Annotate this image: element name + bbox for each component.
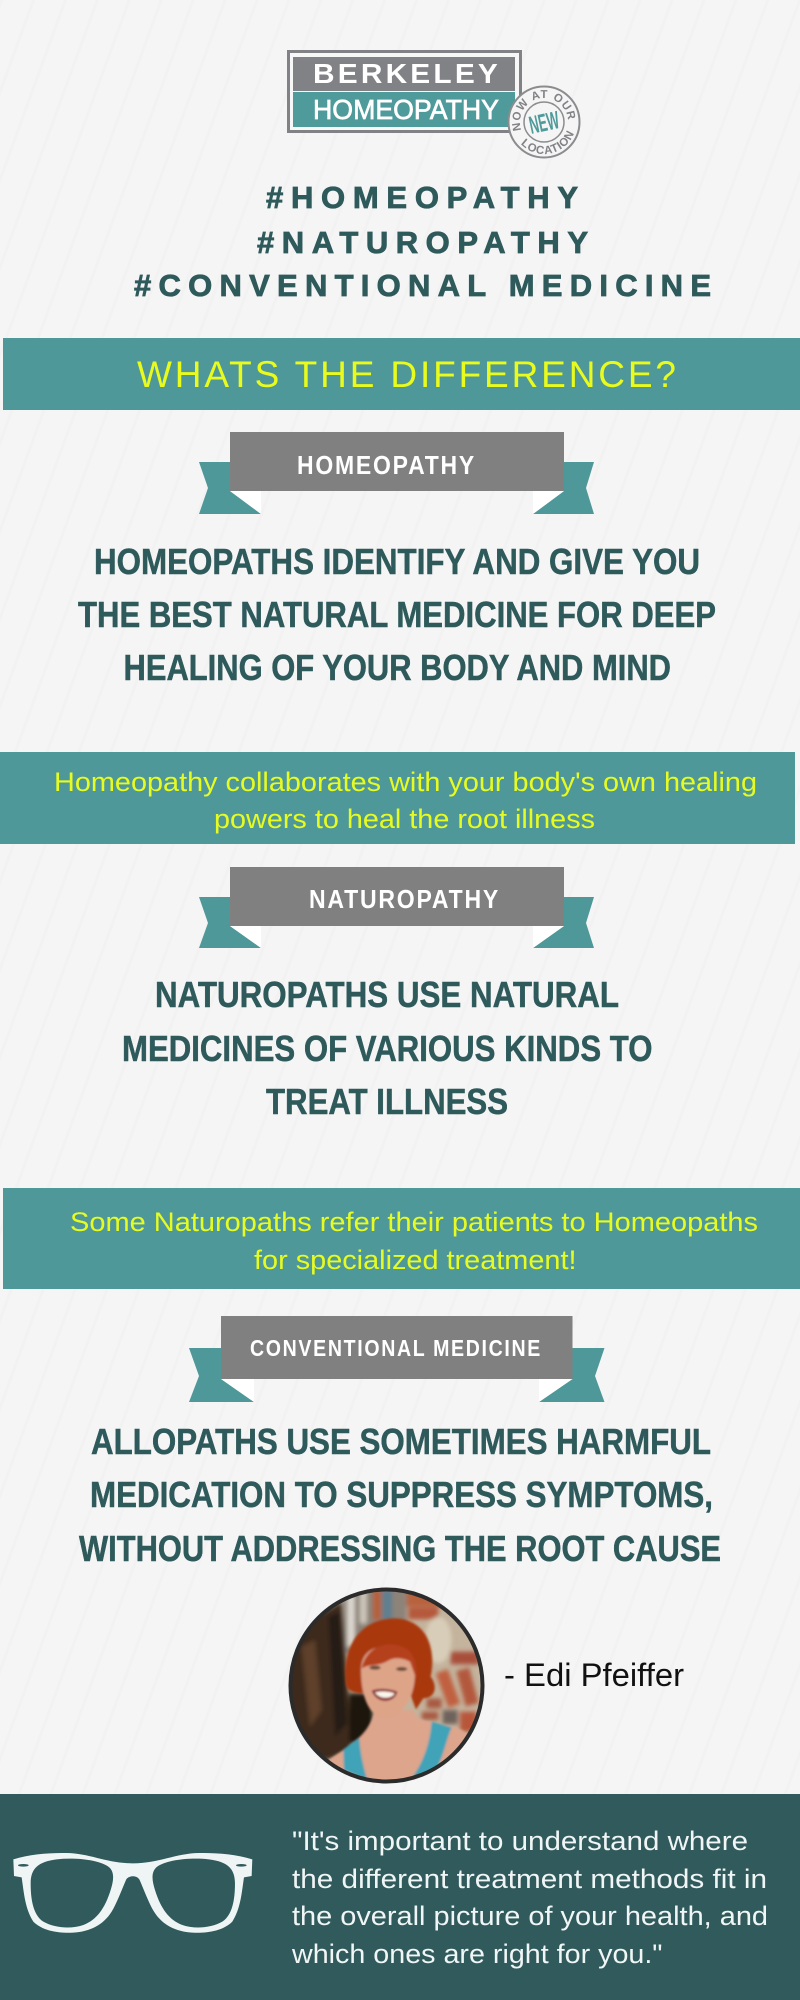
naturopathy description: TREAT ILLNESS	[266, 1081, 508, 1122]
homeopathy description: HOMEOPATHS IDENTIFY AND GIVE YOU	[94, 541, 700, 582]
callout: naturopaths refer	[3, 1188, 800, 1289]
logo: Berkeley Homeopathy: HOMEOPATHY	[313, 94, 499, 125]
badge: now at our new location: LOCATION	[521, 130, 574, 154]
naturopathy description	[122, 974, 652, 1122]
hashtag heading: #CONVENTIONAL MEDICINE	[134, 268, 711, 303]
ribbon: naturopathy: NATUROPATHY	[309, 884, 500, 914]
icon: glasses	[13, 1853, 252, 1933]
badge: now at our new location: NOW AT OUR	[512, 90, 576, 131]
callout: naturopaths refer: Some Naturopaths refer their patients to Homeopaths	[70, 1207, 758, 1237]
conventional medicine description: ALLOPATHS USE SOMETIMES HARMFUL	[91, 1421, 711, 1462]
conventional medicine description: MEDICATION TO SUPPRESS SYMPTOMS,	[90, 1474, 713, 1515]
logo: Berkeley Homeopathy: BERKELEY	[313, 58, 501, 89]
homeopathy description: THE BEST NATURAL MEDICINE FOR DEEP	[78, 594, 716, 635]
badge: now at our new location: NEW	[527, 106, 562, 140]
naturopathy description: NATUROPATHS USE NATURAL	[155, 974, 619, 1015]
callout: homeopathy collaborates	[0, 752, 795, 844]
ribbon: conventional medicine: CONVENTIONAL MEDICINE	[250, 1335, 542, 1361]
quote	[291, 1826, 768, 1969]
quote: "It's important to understand where	[292, 1826, 748, 1856]
conventional medicine description	[79, 1421, 721, 1569]
ribbon: homeopathy: HOMEOPATHY	[297, 450, 476, 480]
quote: which ones are right for you."	[291, 1939, 662, 1969]
quote: the different treatment methods fit in	[292, 1864, 767, 1894]
attribution: Edi Pfeiffer: - Edi Pfeiffer	[504, 1657, 684, 1693]
homeopathy description	[78, 541, 716, 688]
hashtag heading: #NATUROPATHY	[257, 225, 588, 260]
ribbon: conventional medicine	[189, 1316, 604, 1402]
naturopathy description: MEDICINES OF VARIOUS KINDS TO	[122, 1028, 652, 1069]
callout: homeopathy collaborates: powers to heal the root illness	[214, 804, 595, 834]
footer band	[0, 1794, 800, 2000]
portrait photo	[287, 1587, 487, 1787]
ribbon: homeopathy	[199, 432, 594, 514]
homeopathy description: HEALING OF YOUR BODY AND MIND	[124, 647, 671, 688]
callout: homeopathy collaborates: Homeopathy collaborates with your body's own healing	[54, 767, 757, 797]
quote: the overall picture of your health, and	[292, 1901, 768, 1931]
ribbon: naturopathy	[199, 867, 594, 948]
banner: whats the difference: WHATS THE DIFFERENCE?	[137, 354, 676, 395]
logo: Berkeley Homeopathy	[287, 50, 580, 158]
hashtag heading: #HOMEOPATHY	[266, 180, 578, 215]
hashtag heading	[134, 180, 711, 303]
badge: now at our new location	[508, 86, 580, 158]
callout: naturopaths refer: for specialized treatment!	[254, 1245, 576, 1275]
banner: whats the difference	[3, 338, 800, 410]
skin shoulders	[328, 1710, 467, 1780]
